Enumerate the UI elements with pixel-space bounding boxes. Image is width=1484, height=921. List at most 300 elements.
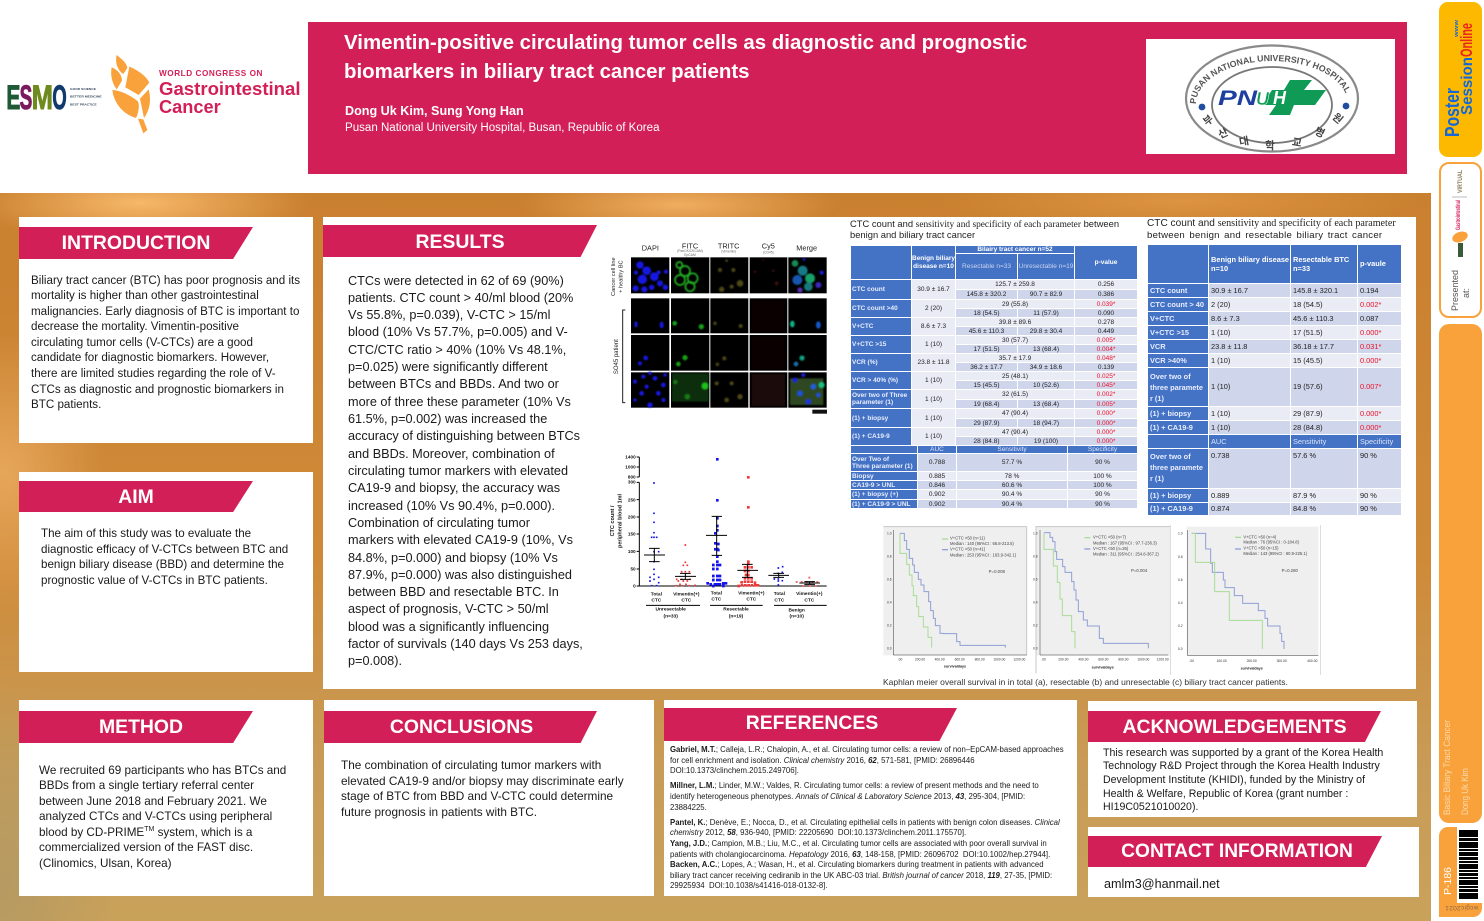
table: benign vs resectable BTC: 36.18 ± 17.7 [1293,342,1334,351]
chart: survival curve c: 200.00 [1247,659,1257,663]
presented at logos and text: Presented [1450,270,1460,311]
table: benign vs biliary tract cancer: 1 (10) [925,377,942,384]
presented at logos and text [1450,170,1471,311]
table: benign vs biliary tract cancer: 0.090 [1098,310,1114,317]
table: AUC, sensitivity and specificity, all BTC: Over Two of [852,456,889,462]
chart: survival curves a and b: 600.00 [1098,658,1109,662]
table: benign vs resectable BTC: 29 (87.9) [1293,409,1323,418]
results text: CTC/CTC ratio > 40% (10% Vs 48.1%, [348,343,566,357]
table: AUC, sensitivity and specificity, all BTC: 0.788 [929,459,945,466]
poster background [0,193,1431,921]
table: benign vs biliary tract cancer [851,246,1137,445]
chart: survival curves a and b: 600.00 [955,658,965,662]
chart: survival curve c: 0.0 [1178,647,1183,651]
table: benign vs resectable BTC: 0.007* [1360,382,1381,391]
chart: survival curves a and b: 0.8 [887,554,892,558]
chart: CTC count dot plot: 800 [628,474,636,479]
chart: CTC count dot plot [610,455,827,620]
table: benign vs resectable BTC: three paramete [1150,463,1203,472]
table: benign vs resectable BTC: n=33 [1293,264,1310,273]
acknowledgements text [1103,746,1383,813]
chart: CTC count dot plot: 300 [628,480,636,485]
chart: CTC count dot plot: 100 [628,549,636,554]
logo: ESMO: O [52,79,67,117]
figure: fluorescence micrographs: TRITC [718,242,740,251]
table: benign vs biliary tract cancer: V+CTC [852,323,874,330]
table: AUC, sensitivity and specificity, all BTC: 90 % [1095,501,1110,508]
table: benign vs biliary tract cancer: 34.9 ± 18.6 [1030,364,1062,371]
table: benign vs resectable BTC: three paramete [1150,382,1203,392]
table: benign vs resectable BTC: CTC count > 40 [1150,300,1204,309]
chart: survival curve c: 0.6 [1178,578,1183,582]
chart: CTC count dot plot: 1400 [625,455,636,460]
table: benign vs resectable BTC [1148,245,1401,515]
chart: survival curves a and b: P=0.008 [989,569,1006,574]
table: benign vs resectable BTC: AUC [1211,437,1227,446]
references list: for cell enrichment and isolation. Clinical chemistry 2016, 62, 571-581, [PMID: 26896446 [670,756,975,765]
sidebar: poster session online tab [1439,2,1482,157]
panel: contact information [1088,827,1419,897]
table: benign vs biliary tract cancer: 18 (94.7) [1033,420,1059,427]
figure: fluorescence micrographs: SO45 patient [614,339,620,374]
table: benign vs biliary tract cancer: 28 (84.8) [973,438,1000,445]
results text: blood was a significantly influencing [348,620,549,634]
chart: survival curves a and b: 1200.00 [1013,658,1025,662]
logo: ESMO: GOOD SCIENCE [70,87,96,91]
table: benign vs biliary tract cancer: 18 (54.5) [973,310,1000,317]
heading: conclusions [324,711,597,743]
table title: benign vs resectable: CTC count and sensitivity and specificity of each parameter [1147,218,1396,229]
references list: DOI:10.1373/clinchem.2015.249706]. Millner, L.M.; Linder, M.W.; Valdes, R. Circulating tumor cells: a review of present methods and the need to [670,766,1039,790]
logo: congress wordmark: Cancer [159,97,221,117]
chart: survival curve c: 0.8 [1178,555,1183,559]
chart: survival curves a and b: 0.0 [887,646,892,650]
table: benign vs biliary tract cancer: Bilairy tract cancer n=52 [977,246,1053,253]
sidebar brand text: www [1454,20,1460,38]
chart: CTC count dot plot: Resectable [723,607,749,613]
figure: fluorescence micrographs: (Vimentin) [721,250,736,254]
results text: CTCs were detected in 62 of 69 (90%) [348,274,564,288]
sidebar brand text [1442,20,1476,137]
results text: and BBDs. Moreover, combination of [348,447,555,461]
figure: fluorescence micrographs: + healthy BC [619,260,625,293]
acknowledgements text: Health & Welfare, Republic of Korea (grant number : [1103,788,1348,800]
method text: (Clinomics, Ulsan, Korea) [39,857,172,870]
results text: blood (10% Vs 57.7%, p=0.005) and V- [348,325,568,339]
chart: CTC count dot plot: CTC [804,598,815,604]
table: benign vs resectable BTC: 0.000* [1360,356,1381,365]
chart: CTC count dot plot: (n=19) [729,614,744,620]
panel: introduction [19,217,313,443]
chart: CTC count dot plot: peripheral blood 1ml [617,493,623,548]
table: benign vs biliary tract cancer: VCR > 40% (%) [852,377,898,384]
chart: CTC count dot plot: Total [774,591,785,597]
table: benign vs resectable BTC: 0.194 [1360,286,1378,295]
table: benign vs biliary tract cancer: 1 (10) [925,341,942,348]
chart: survival curves a and b: 400.00 [1078,658,1089,662]
table: benign vs biliary tract cancer: 19 (100) [1034,438,1058,445]
chart: survival curves a and b: 800.00 [1118,658,1129,662]
introduction text: mortality is higher than other gastrointestinal [31,289,259,302]
chart: survival curves a and b: 400.00 [935,658,945,662]
chart: survival curve c: 0.2 [1178,624,1183,628]
table: benign vs biliary tract cancer: 39.8 ± 89.6 [999,319,1031,326]
table: benign vs biliary tract cancer: 0.278 [1098,319,1114,326]
table: benign vs resectable BTC: CTC count [1150,286,1187,295]
chart: survival curves a and b: 0.8 [1033,554,1038,558]
chart: survival curves a and b: 200.00 [915,658,925,662]
chart: CTC count dot plot: (n=10) [789,614,804,620]
table: benign vs biliary tract cancer: 0.000* [1097,410,1115,417]
chart: survival curve c: Median : 76 (95%CI : 0-184.8) [1243,540,1300,545]
chart: survival curves a and b: 1200.00 [1157,658,1169,662]
figure: fluorescence micrographs: Cancer cell line [611,257,617,296]
table: benign vs biliary tract cancer: (1) + CA19-9 [852,433,890,440]
table: AUC, sensitivity and specificity, all BTC: 0.885 [929,473,945,480]
results text: aspect of prognosis, V-CTC > 50/ml [348,602,549,616]
table: benign vs biliary tract cancer: 8.6 ± 7.3 [921,323,946,330]
table: AUC, sensitivity and specificity, all BTC: 0.902 [929,491,945,498]
table: benign vs resectable BTC: VCR [1150,342,1166,351]
table title: benign vs biliary tract cancer [850,218,1119,240]
table: benign vs resectable BTC: 145.8 ± 320.1 [1293,286,1338,295]
table: benign vs resectable BTC: Over two of [1150,372,1191,380]
figure caption: Kaphlan meier overall survival in in total (a), resectable (b) and unresectable (c) biliary tract cancer patients. [883,677,1288,687]
chart: CTC count dot plot: Vimentin(+) [796,591,823,597]
table: benign vs resectable BTC: r (1) [1150,394,1164,402]
logo: ESMO: E [6,79,20,117]
logo: Pusan National University Hospital seal: 부 [1200,111,1217,129]
logo: Pusan National University Hospital seal: 원 [1329,110,1346,127]
table: benign vs biliary tract cancer: 0.025* [1097,373,1115,380]
table: benign vs resectable BTC: 0.000* [1360,328,1381,337]
logo: ESMO: S [20,79,32,117]
table: benign vs resectable BTC: Benign biliary disease [1211,255,1289,264]
chart: survival curve c: 400.00 [1307,659,1318,663]
sidebar brand text: Session [1459,57,1476,115]
logo: ESMO: BEST PRACTICE [70,103,97,107]
acknowledgements text: This research was supported by a grant of the Korea Health [1103,746,1383,758]
table: AUC, sensitivity and specificity, all BTC: (1) + CA19-9 > UNL [852,501,911,508]
table: benign vs resectable BTC: 57.6 % [1293,451,1316,460]
table: benign vs resectable BTC: V+CTC [1150,314,1174,323]
chart: survival curves a and b: 1000.00 [1137,658,1149,662]
table title: benign vs resectable: between benign and resectable biliary tract cancer [1147,230,1382,241]
table: benign vs resectable BTC: n=10 [1211,264,1228,273]
table: benign vs resectable BTC: (1) + biopsy [1150,409,1191,418]
logo: Pusan National University Hospital seal: 대 [1238,133,1250,150]
chart: survival curve c: .00 [1189,659,1194,663]
chart: survival curve c [1170,525,1321,675]
chart: CTC count dot plot: (n=33) [663,614,678,620]
table: benign vs resectable BTC: 90 % [1360,504,1377,513]
table: benign vs biliary tract cancer: 23.8 ± 11.8 [918,359,950,366]
chart: survival curves a and b: 200.00 [1058,658,1069,662]
table: benign vs biliary tract cancer: 13 (68.4) [1033,401,1059,408]
table: benign vs biliary tract cancer: 29 (55.8) [1002,301,1028,308]
logo: Pusan National University Hospital seal: PN [1218,87,1258,110]
conclusions text: stage of BTC from BBD and V-CTC could determine [341,789,613,803]
table: benign vs biliary tract cancer: 47 (90.4) [1002,429,1028,436]
table: benign vs biliary tract cancer: 2 (20) [925,305,942,312]
table: benign vs biliary tract cancer: p-value [1095,259,1117,266]
conclusions text: The combination of circulating tumor markers with [341,758,601,772]
table: benign vs biliary tract cancer: Over two of Three [852,392,907,399]
conclusions text: elevated CA19-9 and/or biopsy may discriminate early [341,774,624,788]
chart: survival curves a and b: V+CTC >50 (n=11) [950,536,986,541]
chart: survival curves a and b: Median : 140 (95%CI : 66.8-213.5) [950,541,1014,546]
heading: contact information: CONTACT INFORMATION [1121,841,1353,862]
references list: Backen, A.C.; Lopes, A.; Wasan, H., et al. Circulating biomarkers during treatment in patients with advanced [670,860,1044,869]
table: benign vs resectable BTC: 1 (10) [1211,409,1230,418]
method text: between June 2018 and February 2021. We [39,795,267,808]
chart: survival curves a and b: .00 [898,658,902,662]
table: benign vs biliary tract cancer: 145.8 ± 320.2 [967,291,1006,298]
table: benign vs biliary tract cancer: 0.048* [1097,355,1115,362]
figure: fluorescence micrographs: DAPI [642,244,659,253]
logo: congress wordmark: Gastrointestinal [159,78,301,99]
chart: survival curves a and b: 0.0 [1033,646,1038,650]
session name: Basic Biliary Tract Cancer [1442,720,1453,815]
table: benign vs resectable BTC: 0.738 [1211,451,1230,460]
chart: survival curves a and b: V+CTC <50 (n=26) [1093,546,1129,551]
table: benign vs biliary tract cancer: 17 (51.5) [973,346,1000,353]
heading: introduction: INTRODUCTION [62,232,210,254]
table: benign vs biliary tract cancer: 15 (45.5) [973,382,1000,389]
table: benign vs resectable BTC: (1) + CA19-9 [1150,423,1193,432]
logo: Pusan National University Hospital seal: 교 [1291,134,1303,151]
table: benign vs resectable BTC: 30.9 ± 16.7 [1211,286,1248,295]
chart: CTC count dot plot: 250 [628,497,636,502]
method text [39,764,286,870]
table: benign vs resectable BTC: 1 (10) [1211,423,1230,432]
chart: survival curves a and b: 0.4 [1033,600,1038,604]
logo: congress wordmark: WORLD CONGRESS ON [159,69,263,78]
references list: identify heterogeneous phenotypes. Annals of Clinical & Laboratory Science 2013, 43, 295-304, [PMID: [670,792,1025,801]
chart: survival curve c: P=0.280 [1282,568,1299,573]
chart: CTC count dot plot: CTC [681,597,692,603]
heading: results [323,225,597,257]
table: AUC, sensitivity and specificity, all BTC: CA19-9 > UNL [852,482,895,489]
table: AUC, sensitivity and specificity, all BTC: 90 % [1095,459,1110,466]
references list: 29925934 DOI:10.1038/s41416-018-0132-8]. [670,881,827,890]
introduction text: BTC patients. [31,398,101,411]
table: benign vs biliary tract cancer: 0.000* [1097,420,1115,427]
figure: fluorescence micrographs: Cy5 [762,242,775,251]
table: benign vs resectable BTC: 45.6 ± 110.3 [1293,314,1334,323]
table: benign vs resectable BTC: 17 (51.5) [1293,328,1323,337]
table: benign vs resectable BTC: (1) + CA19-9 [1150,504,1193,513]
panel: acknowledgements [1088,701,1417,817]
table: benign vs biliary tract cancer: Unresectable n=19 [1019,263,1073,270]
table: benign vs biliary tract cancer: CTC count [852,286,885,293]
sidebar brand text: Online [1457,23,1476,57]
results text [348,274,583,668]
poster title: Vimentin-positive circulating tumor cells as diagnostic and prognostic [344,31,1027,54]
presented at logos and text: at: [1461,288,1471,298]
table: benign vs resectable BTC: 0.087 [1360,314,1378,323]
chart: CTC count dot plot: Total [711,591,722,597]
table: benign vs resectable BTC: V+CTC >15 [1150,328,1189,337]
results text: accuracy of distinguishing between BTCs [348,429,580,443]
heading: method [19,711,253,743]
table: benign vs resectable BTC: 90 % [1360,491,1377,500]
chart: survival curves a and b: 1.0 [1033,531,1038,535]
table: benign vs biliary tract cancer: 30 (57.7) [1002,337,1028,344]
table: benign vs resectable BTC: 28 (84.8) [1293,423,1323,432]
chart: CTC count dot plot: CTC count / [610,505,616,536]
chart: survival curves a and b: 0.4 [887,600,892,604]
table: benign vs biliary tract cancer: 29.8 ± 30.4 [1030,328,1062,335]
logo: ESMO: M [32,79,53,117]
table: AUC, sensitivity and specificity, all BTC: 57.7 % [1002,459,1022,466]
table: AUC, sensitivity and specificity, all BTC: AUC [930,446,944,453]
method text: BBDs from a single tertiary referral center [39,779,254,792]
figure: fluorescence micrographs: Merge [796,244,817,253]
chart: survival curves a and b: V+CTC >50 (n=7) [1093,535,1127,540]
introduction text: Biliary tract cancer (BTC) has poor prognosis and its [31,274,300,286]
heading: acknowledgements: ACKNOWLEDGEMENTS [1122,716,1347,738]
chart: survival curves a and b: 0.2 [1033,623,1038,627]
table: benign vs resectable BTC: 0.002* [1360,300,1381,309]
table: AUC, sensitivity and specificity, all BTC: Biopsy [852,473,874,480]
table: AUC, sensitivity and specificity, all BTC: 60.6 % [1002,482,1022,489]
references list [670,745,1064,890]
table: benign vs resectable BTC: p-vaule [1360,259,1386,268]
heading: references: REFERENCES [746,712,878,734]
chart: CTC count dot plot: Vimentin(+) [738,591,765,597]
table: benign vs biliary tract cancer: 0.004* [1097,346,1115,353]
table: benign vs biliary tract cancer: 0.000* [1097,429,1115,436]
references list: biliary tract cancer receiving cediranib in the UK ABC-03 trial. British journal of cancer 2018, 119, 27-35, [PMID: [670,871,1052,880]
heading: aim [19,481,253,512]
introduction text: candidate for diagnostic biomarkers. However, [31,351,269,364]
acknowledgements text: Technology R&D Project through the Korea Health Industry [1103,760,1380,772]
logo: Pusan National University Hospital seal: PUSAN NATIONAL UNIVERSITY HOSPITAL [1190,54,1350,104]
method text: commercialized version of the FAST disc. [39,841,253,854]
chart: CTC count dot plot: Unresectable [656,607,686,613]
results text: Combination of circulating tumor [348,516,530,530]
logo: Pusan National University Hospital seal [1146,39,1395,154]
table: benign vs biliary tract cancer: 45.6 ± 110.3 [969,328,1004,335]
table title: benign vs biliary tract cancer: CTC count and sensitivity and specificity of each parameter between [850,218,1119,230]
figure: fluorescence micrographs [611,242,827,414]
table: benign vs resectable BTC: Specificity [1360,437,1393,446]
logo: Pusan National University Hospital seal: 병 [1312,124,1327,141]
table: benign vs resectable BTC: 0.889 [1211,491,1230,500]
aim text: prognostic value of V-CTCs in BTC patients. [41,574,268,587]
table: benign vs biliary tract cancer: Benign biliary [912,255,955,262]
barcode [1457,827,1482,903]
chart: CTC count dot plot: 0 [633,584,636,589]
sidebar: session tab [1439,324,1482,823]
table: benign vs biliary tract cancer: 0.000* [1097,438,1115,445]
figure: fluorescence micrographs: (PanCK/CKCAM) [677,249,703,253]
presenter name: Dong Uk Kim [1460,768,1471,815]
chart: survival curves a and b: V+CTC <50 (n=41) [950,547,986,552]
chart: survival curve c: 300.00 [1277,659,1287,663]
table: AUC, sensitivity and specificity, all BTC: 100 % [1093,482,1112,489]
table: benign vs biliary tract cancer: 0.039* [1097,301,1115,308]
introduction text: circulating tumor cells (V-CTCs) are a good [31,336,253,349]
chart: CTC count dot plot: CTC [711,597,722,603]
panel: method [19,700,313,896]
aim text: diagnostic efficacy of V-CTCs between BTC and [41,543,288,556]
table: AUC, sensitivity and specificity, all BTC: 100 % [1093,473,1112,480]
table: benign vs resectable BTC: 1 (10) [1211,382,1230,391]
chart: survival curve c: Median : 143 (95%CI : 60.9-225.1) [1243,551,1308,556]
method text: analyzed CTCs and V-CTCs using peripheral [39,810,272,823]
table title: benign vs biliary tract cancer: benign and biliary tract cancer [850,229,975,240]
results text: more of three these parameter (10% Vs [348,395,571,409]
conclusions text: future prognosis in patients with BTC. [341,805,537,819]
chart: survival curves a and b [883,526,1170,674]
table: benign vs resectable BTC: 1 (10) [1211,356,1230,365]
table: benign vs resectable BTC: VCR >40% [1150,356,1187,365]
chart: CTC count dot plot: CTC [651,597,662,603]
table: benign vs biliary tract cancer: 1 (10) [925,396,942,403]
table: AUC, sensitivity and specificity, all BTC: (1) + biopsy (+) [852,491,898,498]
chart: CTC count dot plot: CTC [746,597,757,603]
table: benign vs resectable BTC: 87.9 % [1293,491,1316,500]
table: benign vs biliary tract cancer: Resectable n=33 [962,263,1011,270]
table: benign vs biliary tract cancer: 0.449 [1098,328,1114,335]
method text: We recruited 69 participants who has BTCs and [39,764,286,776]
logo: Pusan National University Hospital seal: H [1273,88,1287,108]
table: benign vs biliary tract cancer: 0.002* [1097,391,1115,398]
heading: contact information [1088,836,1382,867]
chart: CTC count dot plot: 1000 [625,465,636,470]
table: benign vs biliary tract cancer: 36.2 ± 17.7 [970,364,1003,371]
table: AUC, sensitivity and specificity, all BTC [851,446,1137,508]
chart: CTC count dot plot: 50 [630,567,636,572]
references list: Gabriel, M.T.; Calleja, L.R.; Chalopin, A., et al. Circulating tumor cells: a review of non–EpCAM-based approaches [670,745,1064,754]
results text: p=0.025) were significantly different [348,360,548,374]
logo: congress wordmark [159,69,301,117]
chart: survival curves a and b: .00 [1041,658,1046,662]
chart: survival curves a and b: Median : 167 (95%CI : 97.7-236.3) [1093,540,1157,545]
table: benign vs biliary tract cancer: parameter (1) [852,399,893,406]
sidebar: presented at tab [1439,162,1482,318]
table: benign vs biliary tract cancer: 30.9 ± 16.7 [917,286,950,293]
table: benign vs resectable BTC: 8.6 ± 7.3 [1211,314,1240,323]
heading: method: METHOD [99,716,183,738]
sidebar: poster number and barcode [1439,827,1482,917]
table: benign vs resectable BTC: 18 (54.5) [1293,300,1323,309]
results text: increased (10% Vs 90.4%, p=0.000). [348,499,555,513]
logo: Pusan National University Hospital seal: 학 [1265,138,1275,153]
table: AUC, sensitivity and specificity, all BTC: 90.4 % [1002,501,1022,508]
heading: conclusions: CONCLUSIONS [390,716,533,738]
table: benign vs resectable BTC: 23.8 ± 11.8 [1211,342,1247,351]
results text: 87.9%, p=0.000) was also distinguished [348,568,572,582]
chart: survival curves a and b: 0.6 [887,577,892,581]
table: benign vs biliary tract cancer: 29 (87.9) [973,420,1000,427]
table: benign vs biliary tract cancer: 0.139 [1098,364,1114,371]
chart: survival curve c: 1.0 [1178,531,1183,535]
chart: CTC count dot plot: 200 [628,515,636,520]
table: benign vs resectable BTC: 2 (20) [1211,300,1230,309]
table: benign vs biliary tract cancer: 0.386 [1098,291,1114,298]
chart: survival curves a and b: Median : 253 (95%CI : 163.9-342.1) [950,552,1017,557]
references list: 23884225. Pantel, K.; Denève, E.; Nocca, D., et al. Circulating epithelial cells in patients with benign colon diseases. Clinical [670,803,1060,827]
table: benign vs resectable BTC: 84.8 % [1293,504,1316,513]
results text: Vs 55.8%, p=0.039), V-CTC > 15/ml [348,308,550,322]
table: benign vs biliary tract cancer: 47 (90.4) [1002,410,1028,417]
chart: survival curves a and b: P=0.004 [1131,568,1148,573]
table: benign vs biliary tract cancer: V+CTC >15 [852,341,886,348]
chart: CTC count dot plot: Total [651,591,662,597]
